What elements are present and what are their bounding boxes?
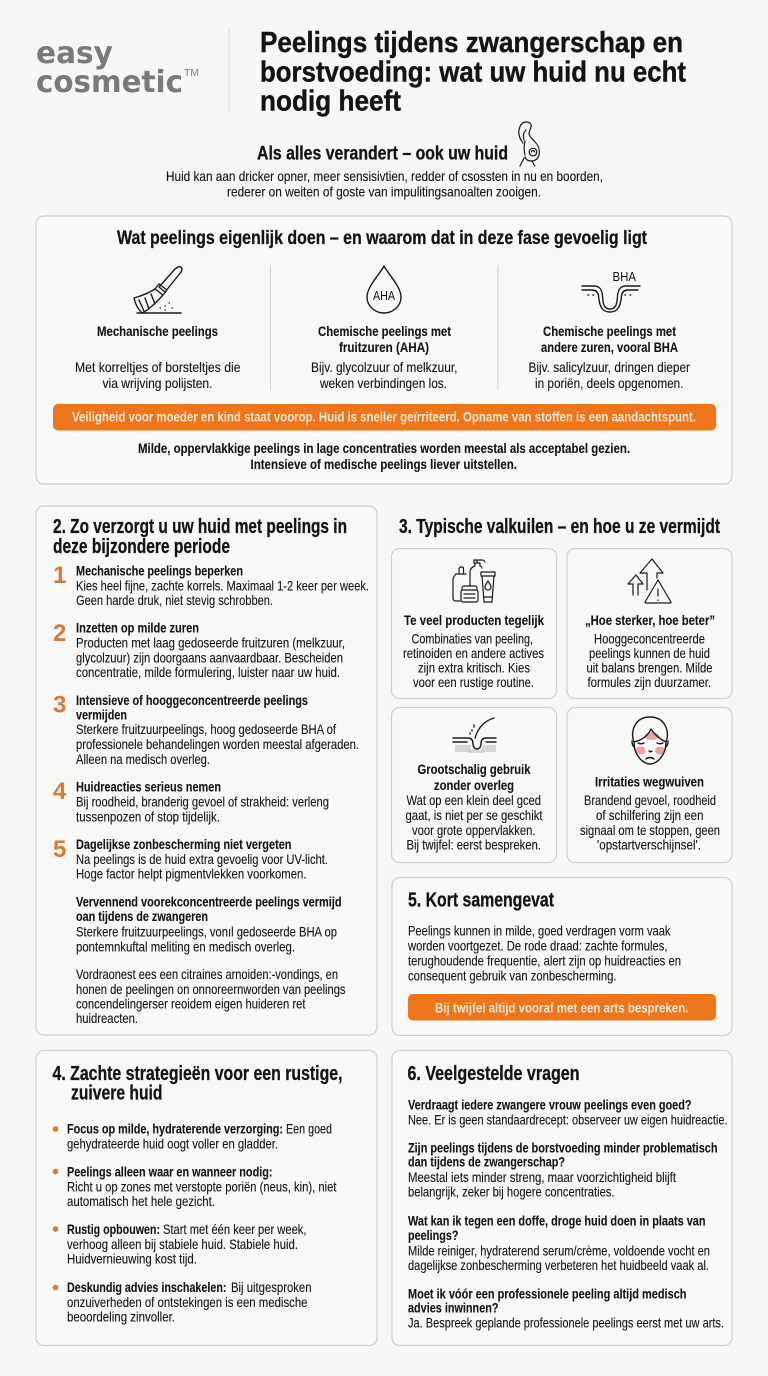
column: andere zuren BHA: andere zuren, vooral BHA bbox=[541, 339, 678, 355]
icon: irritated face bbox=[632, 717, 668, 764]
bullet 2: Peelings alleen waar en wanneer nodig: bbox=[67, 1164, 272, 1180]
panel 2: verzorging bbox=[36, 506, 377, 1035]
card: grootschalig gebruik: Wat op een klein deel gced bbox=[406, 792, 541, 808]
step 2: Inzetten op milde zuren bbox=[76, 620, 199, 636]
heading section 6: 6. Veelgestelde vragen bbox=[408, 1063, 580, 1085]
bullet 3: Huidvernieuwing kost tijd. bbox=[67, 1250, 197, 1266]
column: fruitzuren AHA bbox=[311, 323, 458, 391]
bullet 1: gehydrateerde huid oogt voller en gladder. bbox=[67, 1136, 278, 1152]
callout: arts bbox=[408, 994, 716, 1020]
faq 2: dan tijdens de zwangerschap? bbox=[408, 1154, 565, 1170]
step 1 bbox=[53, 562, 369, 608]
panel conclusion bbox=[138, 440, 630, 472]
card: te veel producten: retinoiden en andere actives bbox=[403, 645, 544, 661]
card: te veel producten: voor een rustige routine. bbox=[413, 674, 534, 690]
bullet 1: Focus op milde, hydraterende verzorging: bbox=[67, 1120, 283, 1136]
summary text: terughoudende frequentie, alert zijn op huidreacties en bbox=[408, 952, 681, 968]
bullet 3: Rustig opbouwen: bbox=[67, 1221, 160, 1237]
bullet 4: beoordeling zinvoller. bbox=[67, 1308, 175, 1324]
summary text bbox=[407, 922, 681, 984]
step 3: Alleen na medisch overleg. bbox=[76, 751, 210, 767]
column: fruitzuren AHA: Chemische peelings met bbox=[318, 323, 451, 339]
faq 2 bbox=[408, 1140, 718, 1200]
closing note: Vordraonest ees een citraines arnoiden:-vondings, en bbox=[76, 966, 338, 982]
heading section 2 bbox=[53, 516, 347, 558]
summary text: consequent gebruik van zonbescherming. bbox=[408, 968, 616, 984]
bullet 4: onzuiverheden of ontstekingen is een medische bbox=[67, 1294, 308, 1310]
card: te veel producten: zijn extra kritisch. Kies bbox=[418, 660, 530, 676]
title bbox=[260, 27, 686, 118]
logo: easy cosmetic: cosmetic bbox=[36, 65, 183, 100]
step 5: 5 bbox=[53, 836, 66, 863]
faq 1: Verdraagt iedere zwangere vrouw peelings even goed? bbox=[408, 1096, 692, 1112]
heading section 4: 4. Zachte strategieën voor een rustige, bbox=[52, 1063, 342, 1085]
intro text: Huid kan aan dricker opner, meer sensisivtien, redder of csossten in nu en boorden, bbox=[166, 168, 603, 184]
card: hoe sterker hoe beter: Hooggeconcentreerde bbox=[594, 630, 705, 646]
step 1: Mechanische peelings beperken bbox=[76, 562, 243, 578]
bullet 4 bbox=[53, 1279, 311, 1324]
closing note: honen de peelingen on onnoreernworden van peelings bbox=[76, 981, 346, 997]
extra note: pontemnkuftal meliting en medisch overleg. bbox=[76, 938, 295, 954]
extra note: oan tijdens de zwangeren bbox=[76, 908, 208, 924]
bullet 3: verhoog alleen bij stabiele huid. Stabiele huid. bbox=[67, 1236, 298, 1252]
step 5 bbox=[53, 836, 328, 882]
closing note: concendelingerser reoidem eigen huideren ret bbox=[76, 996, 306, 1012]
column: mechanische peelings bbox=[75, 323, 241, 391]
card: irritaties: Irritaties wegwuiven bbox=[595, 774, 704, 790]
step 5: Hoge factor helpt pigmentvlekken voorkomen. bbox=[76, 866, 306, 882]
icon: products bbox=[453, 560, 495, 602]
step 4 bbox=[53, 778, 329, 824]
intro heading: Als alles verandert – ook uw huid bbox=[257, 144, 508, 164]
panel conclusion: Intensieve of medische peelings liever uitstellen. bbox=[250, 456, 517, 472]
step 4: Bij roodheid, branderig gevoel of strakheid: verleng bbox=[76, 794, 329, 810]
callout: arts: Bij twijfel altijd vooraf met een arts bespreken. bbox=[435, 1000, 688, 1016]
column: andere zuren BHA bbox=[528, 323, 690, 391]
bullet 3 bbox=[53, 1221, 307, 1266]
step 5: Dagelijkse zonbescherming niet vergeten bbox=[76, 836, 292, 852]
icon: AHA drop: AHA bbox=[373, 288, 395, 303]
column: mechanische peelings: via wrijving polijsten. bbox=[102, 375, 212, 391]
step 5: Na peelings is de huid extra gevoelig voor UV-licht. bbox=[76, 851, 328, 867]
step 3 bbox=[53, 692, 359, 767]
faq 4 bbox=[408, 1286, 724, 1330]
bullet 1 bbox=[53, 1120, 332, 1152]
logo: easy cosmetic: TM bbox=[184, 68, 199, 79]
step 3: Intensieve of hooggeconcentreerde peelings bbox=[76, 692, 308, 708]
icon: arrows and warning bbox=[628, 559, 671, 603]
card: te veel producten bbox=[392, 548, 556, 698]
step 3: 3 bbox=[53, 692, 66, 718]
bullet 2: automatisch het hele gezicht. bbox=[67, 1193, 215, 1209]
icon: skin and hair bbox=[453, 718, 496, 753]
extra note: Sterkere fruitzuurpeelings, vonıl gedoseerde BHA op bbox=[76, 924, 337, 940]
icon: pregnant woman bbox=[519, 122, 539, 166]
step 1: 1 bbox=[53, 562, 66, 589]
card: grootschalig gebruik bbox=[392, 708, 556, 862]
closing note: huidreacten. bbox=[76, 1010, 138, 1026]
faq 4: advies inwinnen? bbox=[408, 1300, 498, 1316]
panel heading: Wat peelings eigenlijk doen – en waarom dat in deze fase gevoelig ligt bbox=[117, 228, 648, 249]
card: grootschalig gebruik: zonder overleg bbox=[434, 777, 514, 793]
closing note bbox=[76, 966, 346, 1026]
heading section 5: 5. Kort samengevat bbox=[408, 890, 554, 912]
summary text: Peelings kunnen in milde, goed verdragen vorm vaak bbox=[408, 922, 671, 938]
heading section 2: 2. Zo verzorgt u uw huid met peelings in bbox=[53, 516, 347, 538]
title: Peelings tijdens zwangerschap en bbox=[260, 27, 683, 59]
bullet 1: Een goed bbox=[286, 1120, 332, 1136]
step 1: Geen harde druk, niet stevig schrobben. bbox=[76, 592, 273, 608]
faq 3 bbox=[408, 1212, 710, 1273]
column: andere zuren BHA: in poriën, deels opgenomen. bbox=[535, 375, 684, 391]
column: fruitzuren AHA: Bijv. glycolzuur of melkzuur, bbox=[311, 359, 458, 375]
intro text bbox=[166, 168, 603, 200]
step 4: tussenpozen of stop tijdelijk. bbox=[76, 808, 220, 824]
card: grootschalig gebruik: voor grote oppervlakken. bbox=[412, 822, 536, 838]
step 4: Huidreacties serieus nemen bbox=[76, 778, 221, 794]
step 2: 2 bbox=[53, 620, 66, 647]
logo: easy cosmetic bbox=[36, 36, 199, 100]
card: hoe sterker hoe beter: peelings kunnen de huid bbox=[589, 645, 710, 661]
column: andere zuren BHA: Bijv. salicylzuur, dringen dieper bbox=[528, 359, 690, 375]
faq 4: Moet ik vóór een professionele peeling altijd medisch bbox=[408, 1286, 686, 1302]
card: te veel producten: Te veel producten tegelijk bbox=[404, 612, 544, 628]
card: grootschalig gebruik: gaat, is niet per se geschikt bbox=[406, 807, 543, 823]
intro text: rederer on weiten of goste van impulitingsanoalten zooigen. bbox=[227, 184, 541, 200]
step 2 bbox=[53, 620, 345, 680]
card: irritaties bbox=[567, 708, 732, 862]
faq 2: Meestal iets minder streng, maar voorzichtigheid blijft bbox=[408, 1169, 676, 1185]
card: irritaties: signaal om te stoppen, geen bbox=[580, 822, 720, 838]
faq 1 bbox=[408, 1096, 728, 1128]
faq 3: peelings? bbox=[408, 1227, 458, 1243]
panel 3: valkuilen bbox=[392, 516, 732, 862]
card: hoe sterker hoe beter: formules zijn duurzamer. bbox=[588, 674, 711, 690]
step 4: 4 bbox=[53, 778, 67, 805]
step 2: Producten met laag gedoseerde fruitzuren (melkzuur, bbox=[76, 634, 345, 650]
panel conclusion: Milde, oppervlakkige peelings in lage concentraties worden meestal als acceptabel gezien. bbox=[138, 440, 630, 456]
column: mechanische peelings: Mechanische peelings bbox=[97, 323, 218, 339]
step 2: concentratie, milde formulering, luister naar uw huid. bbox=[76, 664, 340, 680]
callout: veiligheid bbox=[53, 404, 716, 430]
card: grootschalig gebruik: Grootschalig gebruik bbox=[418, 761, 531, 777]
bullet 2 bbox=[53, 1164, 337, 1209]
summary text: worden voortgezet. De rode draad: zachte formules, bbox=[407, 938, 668, 954]
column: mechanische peelings: Met korreltjes of borsteltjes die bbox=[75, 359, 241, 375]
panel: wat peelings doen bbox=[36, 216, 732, 484]
step 1: Kies heel fijne, zachte korrels. Maximaal 1-2 keer per week. bbox=[76, 578, 369, 594]
bullet 2: Richt u op zones met verstopte poriën (neus, kin), niet bbox=[67, 1178, 337, 1194]
column: andere zuren BHA: Chemische peelings met bbox=[543, 323, 676, 339]
column: fruitzuren AHA: weken verbindingen los. bbox=[319, 375, 447, 391]
column: fruitzuren AHA: fruitzuren (AHA) bbox=[339, 339, 429, 355]
icon: BHA pore: BHA bbox=[612, 269, 636, 284]
faq 2: belangrijk, zeker bij hogere concentraties. bbox=[408, 1184, 614, 1200]
card: hoe sterker hoe beter: „Hoe sterker, hoe beter” bbox=[585, 612, 715, 628]
step 3: professionele behandelingen worden meestal afgeraden. bbox=[76, 736, 359, 752]
card: grootschalig gebruik: Bij twijfel: eerst bespreken. bbox=[406, 836, 541, 852]
logo: easy cosmetic: easy bbox=[36, 36, 113, 71]
heading section 2: deze bijzondere periode bbox=[53, 536, 230, 558]
icon: brush bbox=[134, 267, 182, 313]
bullet 3: Start met één keer per week, bbox=[163, 1221, 306, 1237]
panel 6: veelgestelde vragen bbox=[392, 1050, 732, 1346]
extra note bbox=[76, 894, 342, 954]
card: irritaties: of schilfering zijn een bbox=[596, 807, 704, 823]
title: nodig heeft bbox=[260, 86, 401, 118]
icon: AHA drop bbox=[367, 266, 401, 313]
bullet 4: Deskundig advies inschakelen: bbox=[67, 1279, 226, 1295]
bullet 4: Bij uitgesproken bbox=[231, 1279, 312, 1295]
card: te veel producten: Combinaties van peeling, bbox=[412, 630, 533, 646]
panel 5: samenvatting bbox=[392, 878, 732, 1036]
heading section 4: zuivere huid bbox=[71, 1082, 162, 1104]
card: hoe sterker hoe beter: uit balans brengen. Milde bbox=[586, 660, 713, 676]
card: hoe sterker hoe beter bbox=[567, 548, 732, 698]
step 3: vermijden bbox=[76, 706, 127, 722]
extra note: Vervennend voorekconcentreerde peelings vermijd bbox=[76, 894, 342, 910]
step 2: glycolzuur) zijn doorgaans aanvaardbaar. Bescheiden bbox=[76, 650, 343, 666]
card: irritaties: 'opstartverschijnsel'. bbox=[597, 836, 701, 852]
title: borstvoeding: wat uw huid nu echt bbox=[260, 56, 686, 88]
heading section 4 bbox=[52, 1063, 342, 1104]
panel 4: strategieen bbox=[36, 1050, 377, 1346]
card: irritaties: Brandend gevoel, roodheid bbox=[584, 792, 716, 808]
icon: BHA pore bbox=[582, 269, 640, 312]
step 3: Sterkere fruitzuurpeelings, hoog gedoseerde BHA of bbox=[76, 721, 336, 737]
